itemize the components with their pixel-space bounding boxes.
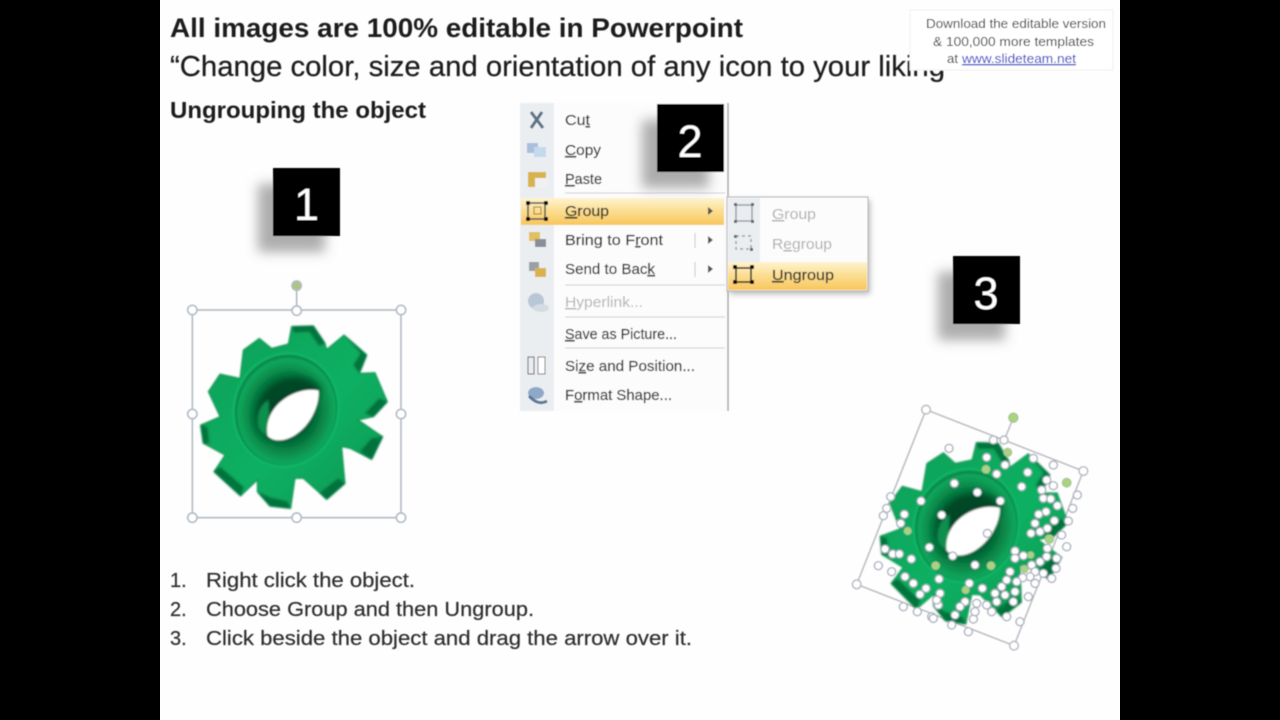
submenu arrows <box>708 207 713 273</box>
ungrouped gear with node handles (step 3) <box>852 405 1088 650</box>
menu labels: Bring to F ront <box>565 232 664 249</box>
menu labels: Copy <box>565 142 602 159</box>
title: All images are 100% editable in Powerpoint <box>170 13 743 43</box>
step badge 2: 2 <box>677 116 703 167</box>
menu labels <box>565 112 695 404</box>
menu icons <box>526 112 549 403</box>
instructions list: Choose Group and then Ungroup. <box>206 599 534 621</box>
subtitle: “Change color, size and orientation of any icon to your liking <box>170 51 945 83</box>
white node handles <box>874 436 1081 636</box>
submenu: group options: Ungroup <box>772 267 834 284</box>
instructions list: 2. <box>170 599 187 621</box>
rotated selection frame <box>857 410 1083 646</box>
menu labels: Hyperlink... <box>565 294 643 311</box>
watermark: download box: at <box>947 51 958 66</box>
submenu: group options: Regroup <box>772 236 832 253</box>
instructions list <box>170 570 692 650</box>
step badge 3: 3 <box>973 268 999 319</box>
corner handles <box>852 405 1088 650</box>
instructions list: 3. <box>170 628 187 650</box>
watermark: download box <box>910 10 1113 70</box>
menu labels: Save as Picture... <box>565 326 677 343</box>
menu labels: Send to Back <box>565 261 656 278</box>
step badge 3 <box>938 256 1020 340</box>
step badge 1: 1 <box>294 179 319 230</box>
selection frame <box>188 281 406 522</box>
menu labels: Paste <box>565 171 602 188</box>
context menu <box>520 103 728 411</box>
submenu: group options: Group <box>772 206 816 223</box>
instructions list: Right click the object. <box>206 570 415 592</box>
submenu: group options <box>727 197 870 294</box>
green gear <box>201 326 387 508</box>
menu labels: Format Shape... <box>565 387 672 404</box>
green gear <box>876 437 1072 629</box>
watermark: download box: Download the editable version <box>926 16 1106 31</box>
menu labels: Size and Position... <box>565 358 695 375</box>
step badge 2 <box>642 104 724 188</box>
instructions list: 1. <box>170 570 187 592</box>
heading: ungrouping the object: Ungrouping the object <box>170 97 426 123</box>
menu labels: Group <box>565 203 609 220</box>
green rotation handles <box>904 413 1071 594</box>
menu labels: Cut <box>565 112 591 129</box>
watermark: download box: & 100,000 more templates <box>933 34 1095 49</box>
instructions list: Click beside the object and drag the arrow over it. <box>206 628 692 650</box>
step badge 1 <box>258 168 340 252</box>
slide background <box>160 0 1120 720</box>
watermark: download box: www.slideteam.net <box>961 51 1076 66</box>
gear with selection box (step 1) <box>188 281 406 522</box>
